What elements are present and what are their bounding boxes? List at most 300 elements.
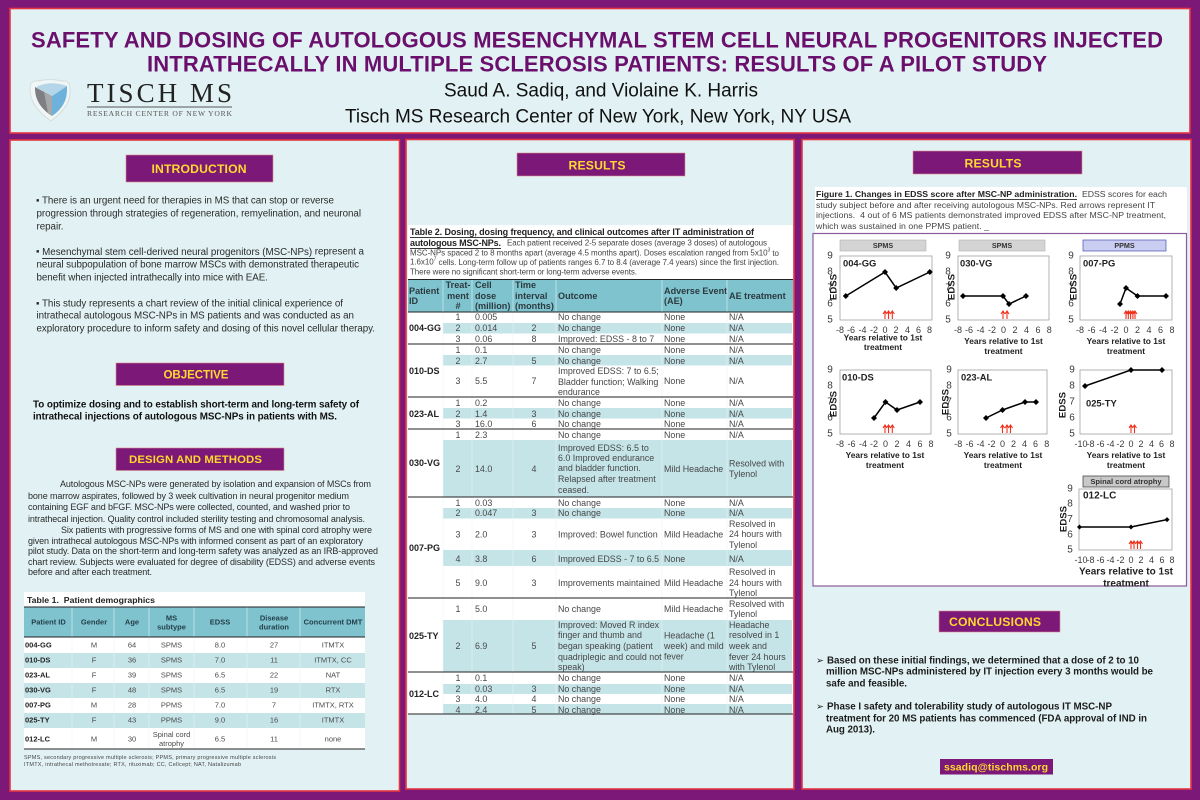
panel: header bbox=[10, 8, 1190, 133]
table 1: patient demographics: 8.0 bbox=[215, 640, 225, 650]
table 2 treatment data: 4 bbox=[532, 694, 537, 704]
chart: 004-GG: SPMS bbox=[873, 241, 893, 250]
chart: 030-VG: 7 bbox=[945, 282, 951, 294]
chart: 007-PG: 8 bbox=[1068, 266, 1074, 278]
text: introduction bullets: progression through strategies of regeneration, remyelination, and neuronal bbox=[36, 208, 361, 220]
table 1: patient demographics: F bbox=[92, 656, 97, 664]
table 2 patient IDs: 007-PG bbox=[409, 543, 440, 553]
figure 1 caption: which was sustained in one PPMS patient. _ bbox=[815, 221, 989, 231]
figure 1 caption bbox=[815, 187, 1187, 234]
title: SAFETY AND DOSING OF AUTOLOGOUS MESENCHYMAL STEM CELL NEURAL PROGENITORS INJECTED bbox=[31, 28, 1163, 52]
table 2 treatment data: 3 bbox=[532, 684, 537, 694]
table 2 treatment data: None bbox=[664, 398, 685, 408]
chart: 007-PG: PPMS bbox=[1114, 241, 1135, 250]
chart: 012-LC: 012-LC bbox=[1083, 490, 1116, 502]
table 2 header row: Cell bbox=[475, 280, 492, 290]
figure 1 caption: study subject before and after receiving autologous MSC-NPs. Red arrows represent IT bbox=[816, 200, 1156, 210]
table 2 treatment data: 3 bbox=[456, 419, 461, 429]
chart: 023-AL: 023-AL bbox=[961, 372, 993, 382]
text: conclusions: safe and feasible. bbox=[826, 678, 907, 690]
chart: 004-GG: 004-GG bbox=[843, 258, 876, 268]
chart: 030-VG: 8 bbox=[1047, 325, 1052, 335]
table 2 header row: Outcome bbox=[558, 291, 597, 301]
table 2 treatment data: fever bbox=[664, 652, 684, 662]
table 2 treatment data: Mild Headache bbox=[664, 578, 723, 588]
table 2 treatment data: 0.047 bbox=[475, 508, 497, 518]
title: INTRATHECALLY IN MULTIPLE SCLEROSIS PATIENTS: RESULTS OF A PILOT STUDY bbox=[147, 52, 1047, 76]
chart: 004-GG: 8 bbox=[927, 325, 932, 335]
chart: 025-TY: 5 bbox=[1069, 428, 1075, 440]
chart: 007-PG: -4 bbox=[1099, 325, 1107, 335]
table 2 treatment data: No change bbox=[558, 323, 601, 333]
table 2 treatment data: 5 bbox=[532, 705, 537, 715]
chart: 030-VG: -2 bbox=[988, 325, 996, 335]
chart: 010-DS: 6 bbox=[827, 412, 833, 424]
chart: 023-AL: 8 bbox=[946, 380, 952, 392]
table 2 treatment data: 0.06 bbox=[475, 334, 492, 344]
chart: 025-TY: Years relative to 1st bbox=[1087, 450, 1166, 460]
table 2 treatment data: N/A bbox=[729, 345, 744, 355]
chart: 007-PG: 7 bbox=[1068, 282, 1074, 294]
table 1: patient demographics: M bbox=[91, 640, 97, 650]
chart: 010-DS: -4 bbox=[859, 439, 867, 449]
panel: results figure and conclusions bbox=[802, 140, 1191, 789]
table 1: patient demographics: SPMS bbox=[161, 670, 182, 680]
chart: 010-DS: -2 bbox=[870, 439, 878, 449]
chart: 007-PG: -6 bbox=[1087, 325, 1096, 335]
chart: 007-PG: 8 bbox=[1169, 325, 1175, 335]
table 2 treatment data: No change bbox=[558, 312, 601, 322]
table 2 treatment data: Mild Headache bbox=[664, 464, 723, 474]
chart: 010-DS: 0 bbox=[883, 439, 888, 449]
table 1: patient demographics: 030-VG bbox=[25, 686, 51, 694]
table 1: patient demographics: SPMS bbox=[161, 686, 182, 694]
chart: 012-LC: 7 bbox=[1067, 514, 1073, 525]
table 1: patient demographics: 48 bbox=[128, 686, 136, 694]
chart: 007-PG: -2 bbox=[1110, 325, 1119, 335]
table 2 treatment data: Resolved in bbox=[729, 519, 775, 529]
table 2 treatment data: finger and thumb and bbox=[558, 630, 642, 640]
table 2 treatment data: week and bbox=[728, 641, 767, 651]
table 1 footnotes bbox=[24, 755, 276, 768]
text: objective: intrathecal injections of autologous MSC-NPs in patients with MS. bbox=[33, 412, 337, 422]
table 2 treatment data bbox=[456, 312, 786, 715]
table 1: patient demographics: Patient ID bbox=[31, 618, 66, 626]
table 1: patient demographics: Table 1. Patient demographics bbox=[27, 595, 155, 605]
text: conclusions: Aug 2013). bbox=[826, 724, 875, 736]
chart: 025-TY: 9 bbox=[1069, 364, 1075, 376]
table 2 treatment data: 16.0 bbox=[475, 419, 492, 429]
table 1: patient demographics: 6.5 bbox=[215, 670, 225, 680]
table 2 treatment data: N/A bbox=[729, 356, 744, 366]
chart: 007-PG: Years relative to 1st bbox=[1087, 336, 1166, 346]
text: conclusions bbox=[816, 656, 1154, 736]
chart: 010-DS: 9 bbox=[827, 364, 833, 376]
table 1: patient demographics: 6.5 bbox=[215, 734, 225, 744]
table 2 treatment data: 2.4 bbox=[475, 705, 487, 715]
chart: 025-TY: 0 bbox=[1128, 439, 1134, 449]
logo: Tisch MS: RESEARCH CENTER OF NEW YORK bbox=[87, 109, 233, 118]
chart: 010-DS: treatment bbox=[866, 460, 904, 470]
chart: 010-DS: Years relative to 1st bbox=[846, 450, 925, 460]
table 2 treatment data: No change bbox=[558, 673, 601, 683]
table 1: patient demographics: ITMTX, RTX bbox=[312, 700, 354, 710]
chart: 012-LC: 0 bbox=[1128, 555, 1134, 565]
table 2 treatment data: Improved EDSS: 6.5 to bbox=[558, 443, 649, 453]
heading: results bbox=[517, 153, 685, 176]
chart: 007-PG: 007-PG bbox=[1083, 258, 1115, 268]
chart: 007-PG: treatment bbox=[1107, 346, 1145, 356]
chart: 030-VG: EDSS bbox=[946, 273, 958, 300]
table 2 treatment data: None bbox=[664, 419, 685, 429]
table 2 treatment data: 5.0 bbox=[475, 604, 487, 614]
chart: 010-DS: 5 bbox=[827, 428, 833, 440]
chart: 025-TY bbox=[1058, 364, 1175, 470]
table 2 treatment data: 3 bbox=[532, 530, 537, 540]
table 2 treatment data: began speaking (patient bbox=[558, 641, 653, 651]
table 2 treatment data: 3 bbox=[456, 334, 461, 344]
table 2 treatment data: No change bbox=[558, 508, 601, 518]
table 2 treatment data: 1 bbox=[456, 345, 461, 355]
chart: 010-DS: 2 bbox=[894, 439, 900, 449]
table 1: patient demographics: SPMS bbox=[161, 656, 182, 664]
chart: 023-AL: treatment bbox=[984, 460, 1022, 470]
chart: 030-VG bbox=[945, 240, 1052, 356]
text: methods: bone marrow aspirates, followed by 3 week cultivation in neural progenitor medium bbox=[28, 491, 349, 501]
table 2 treatment data: No change bbox=[558, 604, 601, 614]
text: conclusions: Phase I safety and tolerability study of autologous IT MSC-NP bbox=[827, 702, 1112, 712]
table 2 treatment data: None bbox=[664, 334, 685, 344]
chart: 012-LC bbox=[1058, 476, 1175, 590]
chart: 025-TY: treatment bbox=[1107, 460, 1145, 470]
chart: 012-LC: 8 bbox=[1169, 555, 1175, 565]
table 2 treatment data: 0.014 bbox=[475, 323, 497, 333]
table 2 treatment data: 3 bbox=[532, 508, 537, 518]
heading: objective: OBJECTIVE bbox=[164, 368, 229, 382]
table 2 header row: (million) bbox=[475, 301, 510, 311]
figure 1 frame with charts bbox=[813, 234, 1186, 590]
table 2 treatment data: 0.03 bbox=[475, 684, 492, 694]
table 2 treatment data: 6.9 bbox=[475, 641, 487, 651]
table 2 treatment data: N/A bbox=[729, 323, 744, 333]
table 2 treatment data: N/A bbox=[729, 705, 744, 715]
table 2 treatment data: Headache (1 bbox=[664, 630, 715, 640]
table 2 treatment data: Tylenol bbox=[729, 469, 757, 479]
table 1: patient demographics: F bbox=[92, 716, 97, 724]
chart: 004-GG bbox=[827, 240, 933, 352]
chart: 004-GG: -8 bbox=[836, 325, 844, 335]
chart: 023-AL: 5 bbox=[946, 428, 952, 440]
table 2 treatment data: week) and mild bbox=[663, 641, 724, 651]
text: methods: containing EGF and bFGF. MSC-NPs were collected, counted, and washed prior to bbox=[28, 502, 350, 512]
heading: results: RESULTS bbox=[964, 156, 1022, 170]
text: introduction bullets bbox=[36, 196, 375, 334]
chart: 025-TY: 4 bbox=[1149, 439, 1154, 449]
table 2 treatment data: Tylenol bbox=[729, 609, 757, 619]
text: conclusions: ➢ bbox=[816, 702, 824, 712]
chart: 012-LC: 6 bbox=[1067, 530, 1073, 540]
chart: 010-DS: 010-DS bbox=[842, 372, 874, 382]
chart: 004-GG: -4 bbox=[858, 325, 867, 335]
table 2 treatment data: 9.0 bbox=[475, 578, 487, 588]
table 2 treatment data: 1.4 bbox=[475, 409, 487, 419]
table 2 header row: dose bbox=[475, 291, 496, 301]
table 2 treatment data: None bbox=[664, 356, 685, 366]
chart: 030-VG: -4 bbox=[976, 325, 985, 335]
table 2 patient IDs: 010-DS bbox=[409, 366, 440, 376]
table 2 treatment data: 3 bbox=[532, 409, 537, 419]
text: introduction bullets: ▪ There is an urgent need for therapies in MS that can stop or reverse bbox=[36, 196, 335, 206]
table 2 treatment data: N/A bbox=[729, 334, 744, 344]
table 2 header row: Patient bbox=[409, 286, 439, 296]
table 2 treatment data: None bbox=[664, 673, 685, 683]
table 2 caption: 7 bbox=[434, 256, 437, 262]
text: introduction bullets: exploratory procedure to inform safety and dosing of this novel cellular therapy. bbox=[36, 324, 375, 334]
text: methods: intrathecal injection. Quality control included sterility testing and chromosomal analysis. bbox=[28, 514, 365, 524]
table 2 header row bbox=[408, 280, 793, 312]
table 2 treatment data: speak) bbox=[558, 662, 585, 672]
table 1: patient demographics: F bbox=[92, 670, 97, 680]
table 2 treatment data: Improved EDSS: 7 to 6.5; bbox=[558, 366, 659, 376]
table 2 patient IDs: 004-GG bbox=[409, 323, 441, 333]
chart: 023-AL: 6 bbox=[1033, 439, 1038, 449]
table 2 treatment data: 0.005 bbox=[475, 312, 497, 322]
authors: Saud A. Sadiq, and Violaine K. Harris bbox=[444, 80, 758, 102]
chart: 004-GG: 6 bbox=[916, 325, 921, 335]
text: objective bbox=[33, 400, 360, 422]
text: methods bbox=[28, 479, 378, 577]
chart: 012-LC: -6 bbox=[1096, 555, 1105, 565]
text: introduction bullets: neural subpopulation of bone marrow MSCs with demonstrated therapeutic bbox=[36, 260, 359, 270]
table 1: patient demographics: none bbox=[325, 734, 341, 744]
table 2 treatment data: 2 bbox=[456, 684, 461, 694]
panel: introduction, objective, methods bbox=[10, 140, 400, 791]
table 2 treatment data: None bbox=[664, 323, 685, 333]
chart: 025-TY: 2 bbox=[1138, 439, 1144, 449]
text: methods: given intrathecal autologous MSC-NPs with informed consent as part of an exploratory bbox=[28, 536, 364, 546]
chart: 012-LC: 6 bbox=[1159, 555, 1165, 565]
table 2 treatment data: Improved: Moved R index bbox=[558, 620, 660, 630]
table 1: patient demographics: 7.0 bbox=[215, 700, 225, 710]
table 1: patient demographics: 023-AL bbox=[25, 670, 50, 680]
table 2 caption bbox=[410, 227, 780, 276]
table 2 treatment data: 2 bbox=[456, 409, 461, 419]
table 1: patient demographics: PPMS bbox=[161, 700, 182, 710]
heading: conclusions: CONCLUSIONS bbox=[949, 615, 1041, 629]
table 2 treatment data: None bbox=[664, 694, 685, 704]
table 1: patient demographics: Gender bbox=[81, 618, 107, 626]
chart: 030-VG: 2 bbox=[1012, 325, 1018, 335]
chart: 025-TY: -4 bbox=[1106, 439, 1115, 449]
table 2 treatment data: fever 24 hours bbox=[729, 652, 786, 662]
table 1 footnotes: SPMS, secondary progressive multiple sclerosis; PPMS, primary progressive multiple sclerosis bbox=[24, 755, 276, 761]
chart: 004-GG: -6 bbox=[847, 325, 855, 335]
table 2 treatment data: No change bbox=[558, 356, 601, 366]
table 2 treatment data: None bbox=[664, 312, 685, 322]
table 2 treatment data: N/A bbox=[729, 554, 744, 564]
chart: 023-AL: 7 bbox=[946, 396, 952, 408]
heading: objective bbox=[116, 363, 284, 386]
table 2 treatment data: Mild Headache bbox=[664, 604, 723, 614]
table 1: patient demographics: F bbox=[92, 686, 97, 694]
chart: 025-TY: 025-TY bbox=[1086, 398, 1117, 408]
chart: 023-AL: Years relative to 1st bbox=[964, 450, 1043, 460]
table 2 treatment data: None bbox=[664, 554, 685, 564]
chart: 012-LC: EDSS bbox=[1058, 505, 1070, 532]
table 2 treatment data: Resolved with bbox=[729, 599, 784, 609]
table 1: patient demographics: Age bbox=[125, 618, 139, 626]
table 2 treatment data: Relapsed after treatment bbox=[558, 474, 656, 484]
text: methods: chart review. Subjects were evaluated for degree of disability (EDSS) and adverse events bbox=[28, 557, 376, 567]
table 2 treatment data: None bbox=[664, 705, 685, 715]
chart: 007-PG: 0 bbox=[1123, 325, 1129, 335]
table 2 treatment data: No change bbox=[558, 684, 601, 694]
table 2 header row: AE treatment bbox=[729, 291, 786, 301]
table 1: patient demographics: ITMTX bbox=[322, 640, 344, 650]
table 1: patient demographics: RTX bbox=[326, 686, 340, 694]
table 2 caption: cells. Long-term follow up of patients ranges 6.7 to 8.4 (average 7.4 years) since the first injection. bbox=[436, 258, 779, 266]
table 2 treatment data: 0.2 bbox=[475, 398, 487, 408]
chart: 023-AL: 6 bbox=[946, 412, 952, 424]
table 1: patient demographics: 39 bbox=[128, 670, 136, 680]
table 2 treatment data: No change bbox=[558, 398, 601, 408]
table 1: patient demographics: SPMS bbox=[161, 640, 182, 650]
table 2 treatment data: No change bbox=[558, 345, 601, 355]
table 2 treatment data: ceased. bbox=[558, 485, 589, 495]
chart: 023-AL: -2 bbox=[987, 439, 996, 449]
logo: Tisch MS: TISCH MS bbox=[87, 78, 232, 108]
table 2 treatment data: N/A bbox=[729, 312, 744, 322]
table 2 treatment data: Headache bbox=[729, 620, 770, 630]
table 2 header row: # bbox=[455, 301, 461, 311]
table 1: patient demographics: 22 bbox=[270, 670, 278, 680]
text: introduction bullets: repair. bbox=[36, 222, 64, 232]
table 2 treatment data: N/A bbox=[729, 409, 744, 419]
table 2 treatment data: Tylenol bbox=[729, 540, 757, 550]
chart: 010-DS: 8 bbox=[827, 380, 833, 392]
table 1: patient demographics: M bbox=[91, 700, 97, 710]
table 2 treatment data: Resolved in bbox=[729, 567, 775, 577]
table 2 treatment data: N/A bbox=[729, 376, 744, 386]
table 2 treatment data: Mild Headache bbox=[664, 530, 723, 540]
table 1: patient demographics: 11 bbox=[270, 734, 278, 744]
table 2 treatment data: 2 bbox=[456, 464, 461, 474]
chart: 012-LC: Spinal cord atrophy bbox=[1090, 477, 1162, 486]
table 2 treatment data: N/A bbox=[729, 673, 744, 683]
chart: 012-LC: 4 bbox=[1149, 555, 1154, 565]
table 1: patient demographics: 025-TY bbox=[25, 716, 50, 724]
table 2 treatment data: quadriplegic and could not bbox=[558, 652, 662, 662]
table 1: patient demographics: 27 bbox=[270, 640, 278, 650]
table 1: patient demographics: ITMTX bbox=[322, 716, 344, 724]
table 2 treatment data: None bbox=[664, 345, 685, 355]
table 1: patient demographics: Concurrent DMT bbox=[304, 618, 363, 626]
table 1: patient demographics: 6.5 bbox=[215, 686, 225, 694]
table 2 treatment data: 1 bbox=[456, 673, 461, 683]
chart: 012-LC: -4 bbox=[1106, 555, 1115, 565]
chart: 025-TY: -10 bbox=[1074, 439, 1088, 449]
chart: 004-GG: treatment bbox=[864, 342, 902, 352]
table 2 treatment data: None bbox=[664, 409, 685, 419]
chart: 004-GG: -2 bbox=[870, 325, 878, 335]
table 2 treatment data: No change bbox=[558, 694, 601, 704]
table 2 treatment data: 3.8 bbox=[475, 554, 487, 564]
text: introduction bullets: intrathecal autologous MSC-NPs in MS patients and was conducted as an bbox=[36, 310, 354, 322]
chart: 023-AL: 8 bbox=[1044, 439, 1049, 449]
table 2 treatment data: No change bbox=[558, 419, 601, 429]
chart: 004-GG: 0 bbox=[882, 325, 888, 335]
table 2 treatment data: 0.03 bbox=[475, 498, 492, 508]
chart: 004-GG: Years relative to 1st bbox=[844, 332, 923, 342]
heading: design and methods bbox=[116, 448, 284, 470]
chart: 004-GG: 6 bbox=[827, 298, 833, 310]
table 1: patient demographics: 007-PG bbox=[25, 700, 51, 710]
table 2 treatment data: 2 bbox=[456, 508, 461, 518]
table 2 caption: Table 2. Dosing, dosing frequency, and clinical outcomes after IT administration of bbox=[410, 227, 755, 237]
table 2 patient IDs: 012-LC bbox=[409, 689, 440, 699]
table 2 caption: 3 bbox=[768, 248, 771, 254]
table 2 treatment data: N/A bbox=[729, 694, 744, 704]
table 2 treatment data: None bbox=[664, 430, 685, 440]
table 2 treatment data: N/A bbox=[729, 508, 744, 518]
heading: introduction bbox=[126, 155, 273, 182]
table 2 caption: Each patient received 2-5 separate doses (average 3 doses) of autologous bbox=[507, 238, 767, 248]
table 2 treatment data: N/A bbox=[729, 419, 744, 429]
table 2 treatment data: 2.3 bbox=[475, 430, 487, 440]
table 2 treatment data: Tylenol bbox=[729, 588, 757, 598]
chart: 025-TY: 6 bbox=[1159, 439, 1164, 449]
table 1: patient demographics: 11 bbox=[270, 656, 278, 664]
chart: 030-VG: -6 bbox=[965, 325, 973, 335]
text: methods: Six patients with progressive forms of MS and one with spinal cord atrophy were bbox=[61, 525, 372, 535]
table 2 treatment data: 3 bbox=[456, 694, 461, 704]
table 1: patient demographics: 64 bbox=[128, 640, 136, 650]
table 2 treatment data: 0.1 bbox=[475, 673, 487, 683]
chart: 030-VG: Years relative to 1st bbox=[964, 336, 1043, 346]
table 1: patient demographics: duration bbox=[259, 622, 289, 632]
chart: 010-DS: 7 bbox=[827, 396, 833, 408]
table 2 treatment data: 4 bbox=[456, 705, 461, 715]
table 2 treatment data: 7 bbox=[532, 376, 537, 386]
chart: 004-GG: 5 bbox=[827, 314, 833, 326]
table 2 treatment data: No change bbox=[558, 705, 601, 715]
table 1: patient demographics: 43 bbox=[128, 716, 136, 724]
table 1: patient demographics: MS bbox=[166, 614, 177, 622]
logo: Tisch MS bbox=[30, 78, 233, 121]
chart: 023-AL: -4 bbox=[976, 439, 985, 449]
chart: 025-TY: EDSS bbox=[1058, 391, 1068, 418]
chart: 004-GG: 7 bbox=[827, 282, 833, 294]
chart: 030-VG: 5 bbox=[945, 314, 951, 326]
table 2 treatment data: 2 bbox=[532, 323, 537, 333]
chart: 004-GG: EDSS bbox=[828, 273, 840, 300]
chart: 030-VG: 0 bbox=[1001, 325, 1006, 335]
table 1: patient demographics: 28 bbox=[128, 700, 136, 710]
chart: 004-GG: 4 bbox=[905, 325, 910, 335]
table 2 treatment data: Improvements maintained bbox=[558, 578, 660, 588]
table 2 treatment data: No change bbox=[558, 498, 601, 508]
chart: 030-VG: SPMS bbox=[992, 241, 1012, 250]
table 1: patient demographics: atrophy bbox=[159, 739, 184, 748]
table 1: patient demographics: 16 bbox=[270, 716, 278, 724]
contact email: ssadiq@tischms.org bbox=[944, 762, 1048, 774]
table 2 treatment data: Improved EDSS - 7 to 6.5 bbox=[558, 554, 659, 564]
chart: 010-DS: 8 bbox=[928, 439, 934, 449]
table 2 treatment data: endurance bbox=[558, 387, 600, 397]
table 2 treatment data: 3 bbox=[456, 376, 461, 386]
panel: results table bbox=[406, 140, 794, 789]
chart: 025-TY: 8 bbox=[1069, 380, 1075, 392]
